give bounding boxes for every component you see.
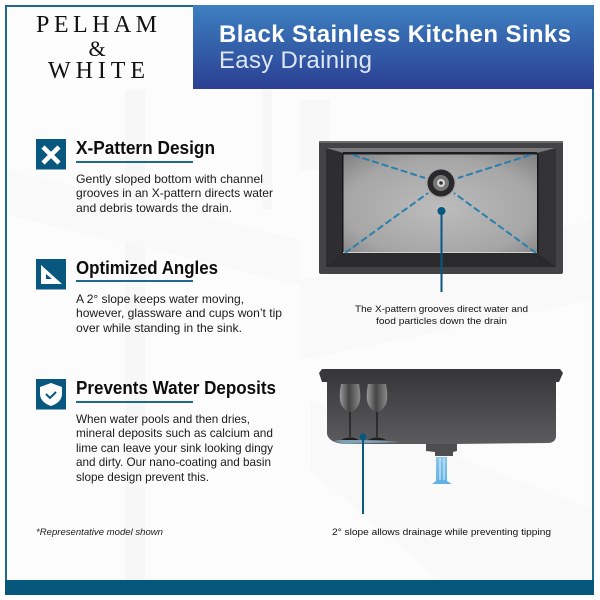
bottom water film [334, 440, 400, 444]
drain pipe [426, 444, 457, 456]
footnote: *Representative model shown [36, 527, 163, 537]
body text: Optimized Angles [76, 292, 282, 335]
sink top view [319, 141, 563, 274]
body text: X-Pattern Design: and debris towards the drain. [76, 201, 232, 215]
header banner: Black Stainless Kitchen Sinks [219, 21, 571, 48]
logo: Pelham & White [36, 12, 157, 84]
heading: Prevents Water Deposits: Prevents Water Deposits [76, 378, 276, 398]
drain [426, 168, 456, 198]
logo: Pelham & White: & [88, 36, 106, 61]
wine glass left [340, 384, 360, 440]
body text: Prevents Water Deposits: slope design prevent this. [76, 470, 209, 484]
body text: Optimized Angles: however, glassware and cups won’t tip [76, 306, 282, 320]
callout pointer: slope [360, 434, 366, 514]
caption: x-pattern: food particles down the drain [376, 316, 507, 327]
footer bar [5, 580, 594, 595]
header banner [193, 5, 594, 89]
heading: X-Pattern Design: X-Pattern Design [76, 138, 215, 158]
panel: Prevents Water Deposits [36, 378, 276, 484]
x-pattern dashed grooves [345, 155, 536, 253]
heading: Optimized Angles: Optimized Angles [76, 258, 218, 278]
body text: X-Pattern Design: Gently sloped bottom with channel [76, 172, 263, 186]
header banner: Easy Draining [219, 47, 372, 74]
body text: Optimized Angles: over while standing in the sink. [76, 321, 242, 335]
sink side view [319, 369, 563, 456]
caption: x-pattern [355, 304, 528, 327]
body text: Prevents Water Deposits [76, 412, 273, 484]
icon: shield check [36, 379, 66, 410]
body text: X-Pattern Design: grooves in an X-pattern directs water [76, 186, 273, 200]
body text: Prevents Water Deposits: mineral deposits such as calcium and [76, 426, 273, 440]
panel: Optimized Angles [36, 258, 282, 335]
body text: Optimized Angles: A 2° slope keeps water moving, [76, 292, 244, 306]
water stream [432, 457, 452, 484]
body text: X-Pattern Design [76, 172, 273, 215]
icon: set square [36, 259, 66, 290]
wine glass right [367, 384, 387, 440]
caption: x-pattern: The X-pattern grooves direct water and [355, 304, 528, 315]
body text: Prevents Water Deposits: lime can leave your sink looking dingy [76, 441, 273, 455]
panel: X-Pattern Design [36, 138, 273, 215]
body text: Prevents Water Deposits: When water pools and then dries, [76, 412, 250, 426]
logo: Pelham & White: PELHAM [36, 12, 157, 38]
callout pointer: x-pattern [438, 207, 446, 292]
icon: X [36, 139, 66, 170]
body text: Prevents Water Deposits: and dirty. Our nano-coating and basin [76, 455, 271, 469]
logo: Pelham & White: WHITE [48, 58, 145, 84]
caption: slope: 2° slope allows drainage while preventing tipping [332, 527, 551, 538]
